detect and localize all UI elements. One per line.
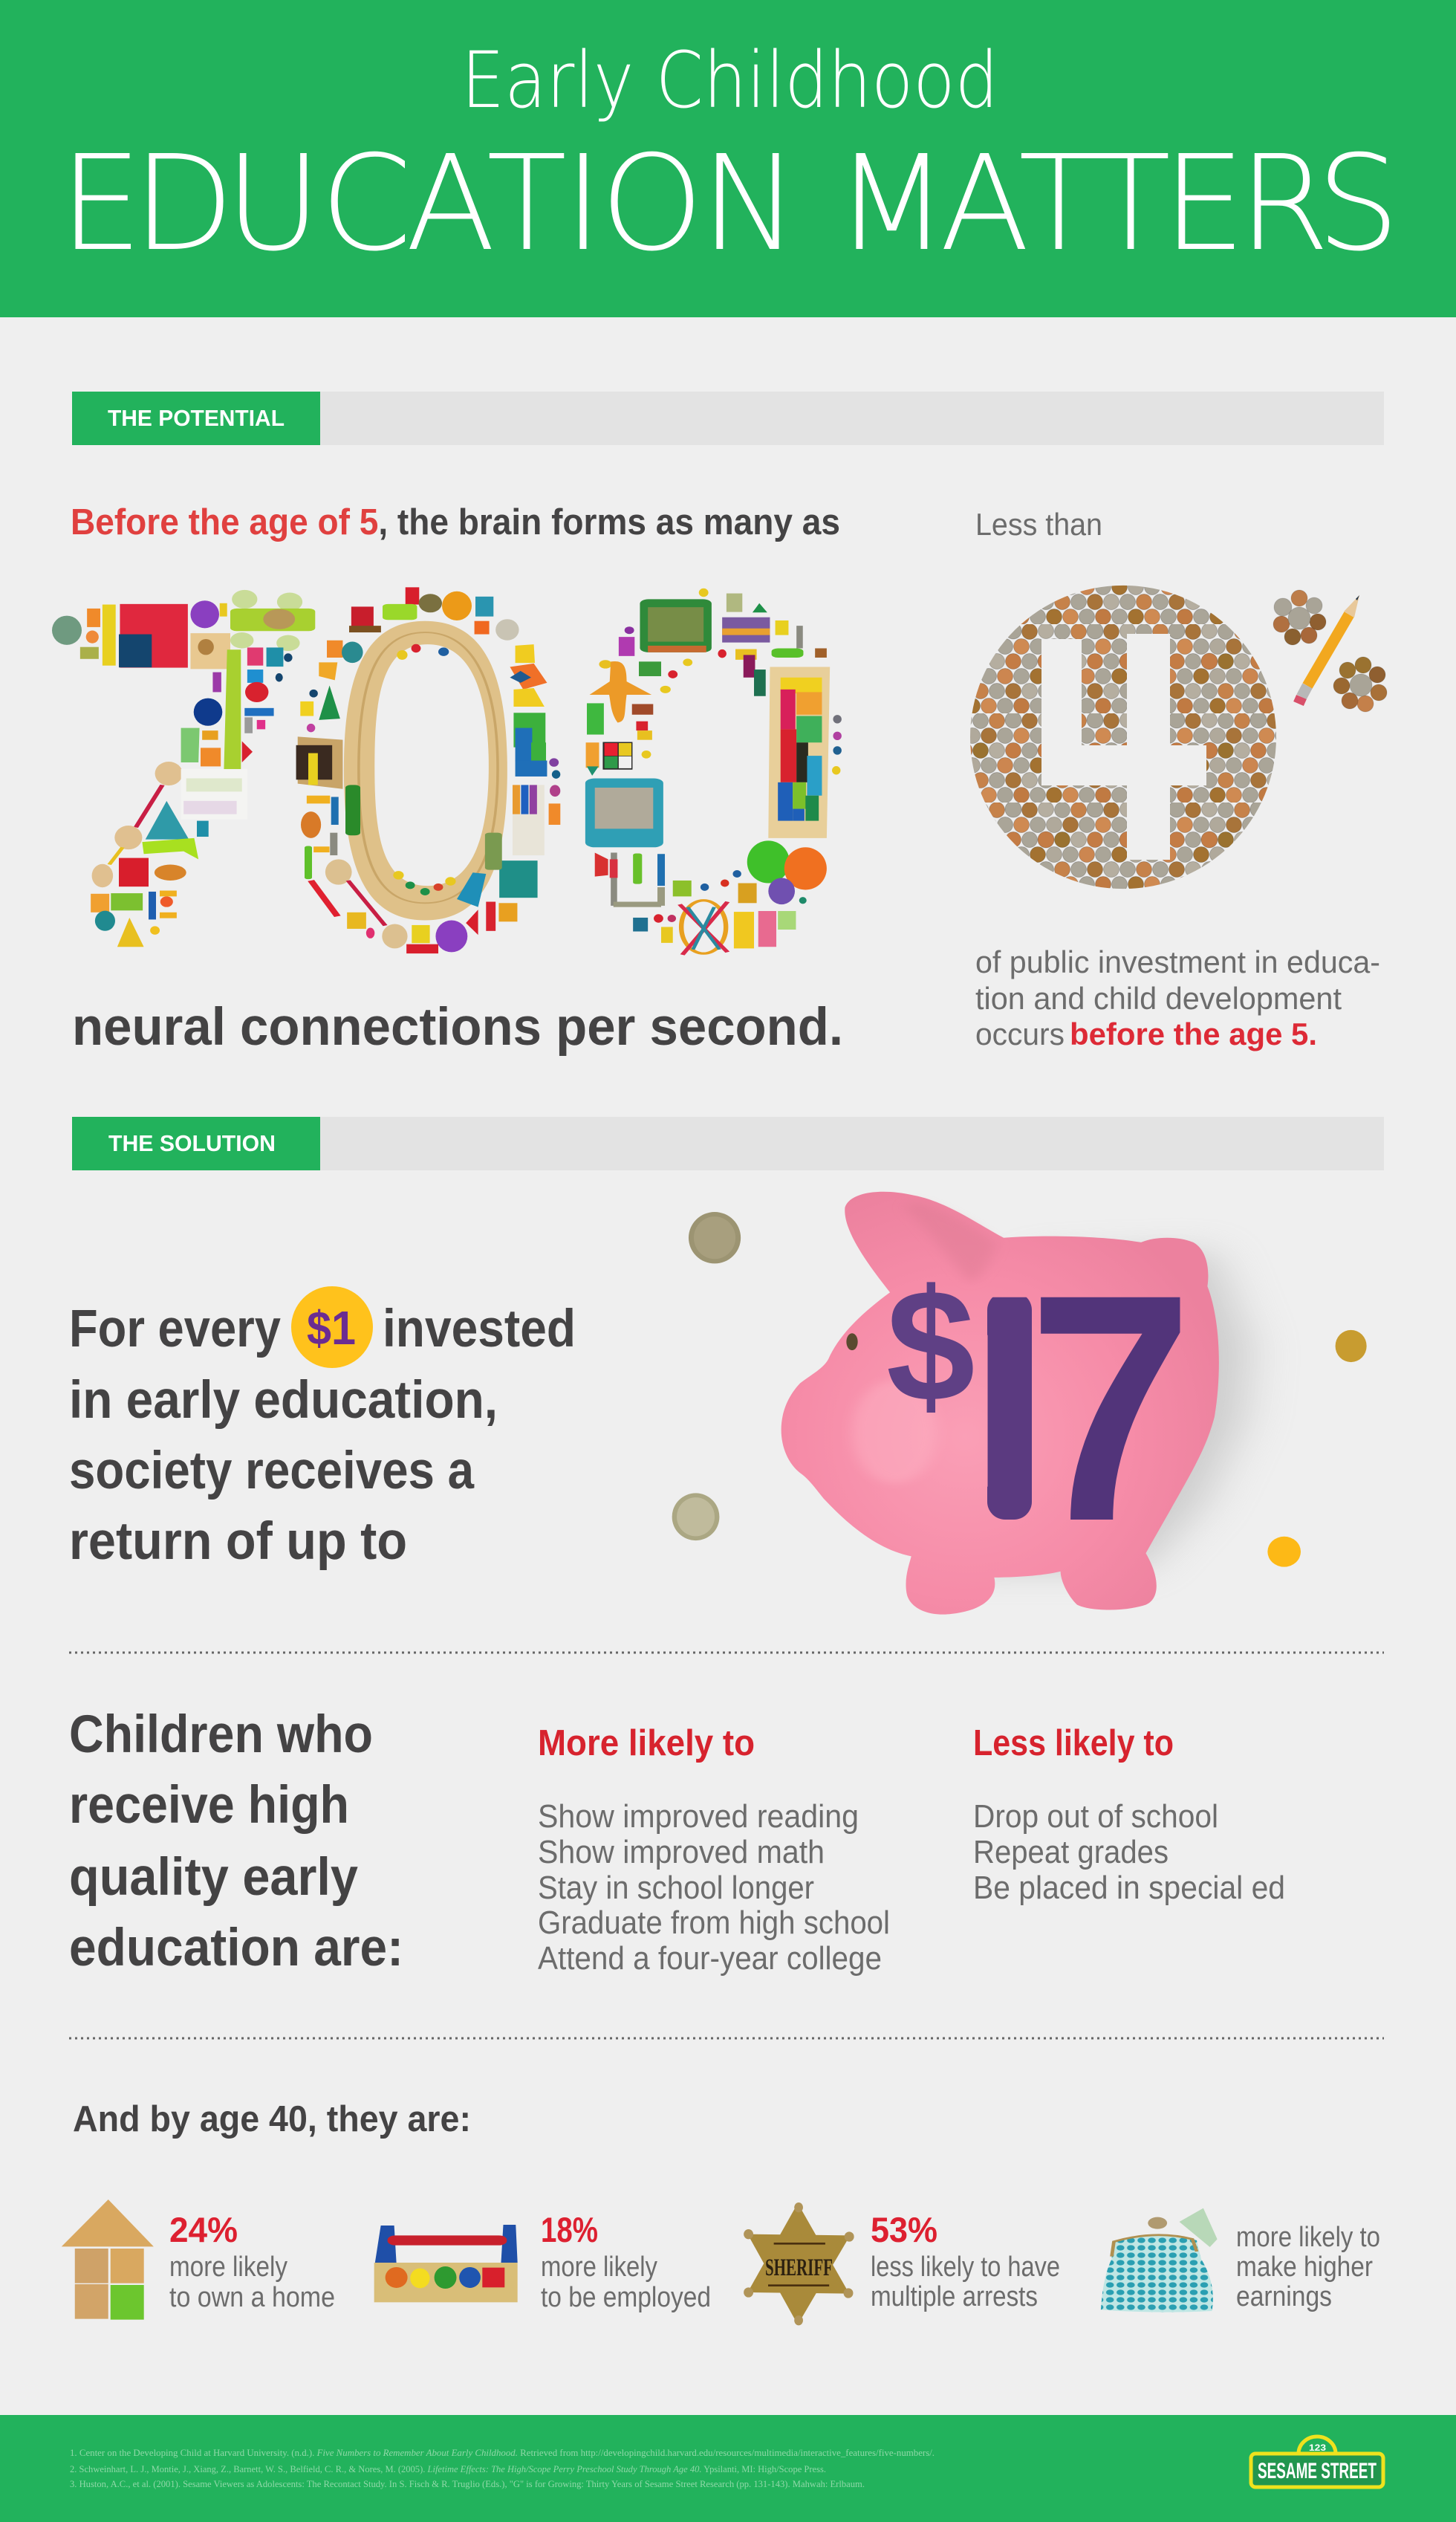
badge: one dollar [291,1286,373,1368]
stat: multiple arrests: 53% [871,2210,937,2249]
section bar: the potential [72,392,1384,445]
text: public investment [975,944,1380,1051]
heading: brain connections lead-in: Before the age of 5, the brain forms as many as [71,502,840,542]
list: more likely to: Show improved reading [538,1798,859,1835]
painted $17 on pig [888,1282,1180,1520]
list: more likely to: Stay in school longer [538,1870,814,1906]
section bar: the solution: THE SOLUTION [108,1130,276,1156]
stat: multiple arrests: less likely to have [871,2252,1060,2283]
list: more likely to [538,1723,890,1977]
stat: multiple arrests: multiple arrests [871,2281,1038,2312]
stat: higher earnings: earnings [1236,2281,1332,2312]
references [70,2448,935,2489]
illustration: 700 made of toys [52,587,842,955]
icon: pencil [1299,595,1359,704]
badge: one dollar: $1 [307,1301,356,1355]
list: less likely to: Repeat grades [973,1834,1169,1870]
stat: own a home: to own a home [169,2282,335,2313]
logo: sesame street sign [1251,2437,1383,2487]
logo: sesame street sign: 123 [1309,2442,1326,2453]
references: 3. Huston, A.C., et al. (2001). Sesame Viewers as Adolescents: The Recontact Study. In S. Fisch & R. Truglio (Eds.), "G" is for Growing: Thirty Years of Sesame Street Research (pp. 131-143). Mahwah: Erlbaum. [70,2479,865,2489]
title line 2: EDUCATION MATTERS [59,127,1400,280]
stat: multiple arrests [744,2202,1060,2325]
heading: children who receive: Children who [69,1705,373,1764]
painted $17 on pig: 1 [912,1228,1092,1589]
list: less likely to [973,1723,1285,1906]
icon: sheriff badge [744,2202,854,2325]
text: for every dollar invested: For every [69,1300,281,1358]
footer band [0,2415,1456,2522]
toys forming digit 7 [52,590,315,947]
text: for every dollar invested: return of up to [69,1512,407,1571]
list: less likely to: Drop out of school [973,1798,1218,1835]
painted $17 on pig: 7 [1028,1228,1193,1589]
text: for every dollar invested: society receives a [69,1442,474,1500]
divider [69,1651,1384,1654]
heading: children who receive [69,1705,403,1977]
list: more likely to: Graduate from high school [538,1905,890,1941]
header band [0,0,1456,317]
divider [69,2038,1384,2039]
text: less than: Less than [975,507,1102,542]
illustration: piggy bank with coins [672,1192,1367,1615]
text: for every dollar invested: invested [383,1300,576,1358]
stat: higher earnings: more likely to [1236,2222,1380,2253]
stat: be employed: to be employed [541,2282,711,2313]
illustration: 4 percent made of coins [966,580,1387,892]
stat: be employed: 18% [541,2210,598,2249]
stat: higher earnings [1101,2208,1380,2312]
icon: toy toolbox [374,2225,518,2302]
text: public investment: of public investment in educa- [975,944,1380,979]
list: more likely to: Attend a four-year college [538,1940,882,1977]
text: public investment: before the age 5. [1070,1017,1317,1051]
list: less likely to: Be placed in special ed [973,1870,1285,1906]
stat: own a home: 24% [169,2210,238,2249]
stat: be employed [374,2210,711,2313]
pig body [781,1192,1219,1615]
text: public investment: tion and child development [975,981,1342,1016]
section bar: the solution [72,1117,1384,1170]
pig shadow [952,1250,1250,1572]
references: 1. Center on the Developing Child at Harvard University. (n.d.). Five Numbers to Remember About Early Childhood. Retrieved from http://developingchild.harvard.edu/resources/multimedia/interactive_features/five-numbers/. [70,2448,935,2458]
painted $17 on pig: $ [886,1256,975,1435]
heading: children who receive: quality early [69,1848,358,1907]
icon: wooden block house [62,2200,154,2320]
stat: higher earnings: make higher [1236,2252,1373,2283]
percent sign coins [1273,590,1387,712]
toys forming second digit 0 [585,589,842,955]
text: public investment: occurs [975,1017,1065,1051]
heading: children who receive: receive high [69,1776,349,1835]
section bar: the potential: THE POTENTIAL [108,405,285,431]
icon: sheriff badge: SHERIFF [765,2254,833,2281]
heading: children who receive: education are: [69,1919,403,1977]
title line 1: Early Childhood [461,35,998,126]
stat: own a home: more likely [169,2252,287,2283]
references: 2. Schweinhart, L. J., Montie, J., Xiang, Z., Barnett, W. S., Belfield, C. R., & Nores, M. (2005). Lifetime Effects: The High/Scope Perry Preschool Study Through Age 40. Ypsilanti, MI: High/Scope Press. [70,2464,826,2474]
coins on the table [689,1212,741,1263]
icon: coin purse with money [1101,2208,1218,2312]
text: neural connections: neural connections per second. [72,998,843,1057]
coin clock [966,580,1281,892]
toys forming first digit 0 [296,587,560,953]
text: for every dollar invested: in early education, [69,1371,498,1430]
list: more likely to: Show improved math [538,1834,825,1870]
stat: own a home [62,2200,335,2320]
text: for every dollar invested [69,1286,576,1571]
heading: by age 40: And by age 40, they are: [73,2099,471,2139]
list: less likely to: Less likely to [973,1723,1174,1763]
logo: sesame street sign: SESAME STREET [1258,2459,1377,2483]
stat: be employed: more likely [541,2252,657,2283]
list: more likely to: More likely to [538,1723,755,1763]
